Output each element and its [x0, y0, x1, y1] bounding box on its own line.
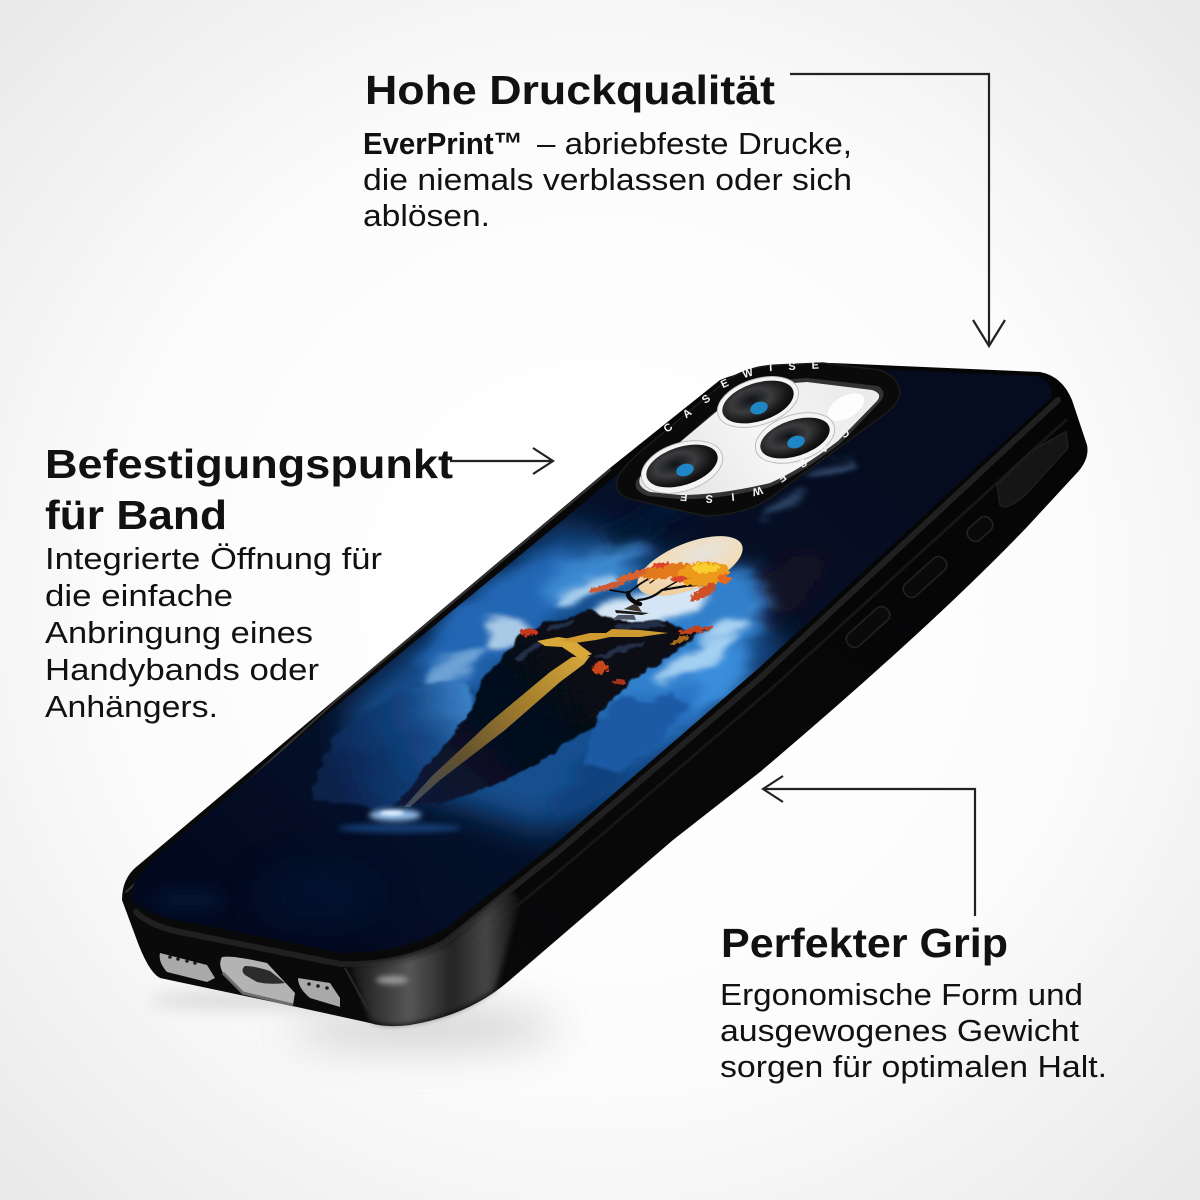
case body: [122, 363, 1088, 1026]
deep blue band: [350, 525, 790, 830]
dark navy blotches: [154, 881, 380, 909]
ring brand lettering: CASEWISE: [664, 361, 819, 432]
heading: Hohe Druckqualität: [365, 67, 775, 113]
arrow: print quality: [790, 74, 1005, 346]
printed artwork: [131, 370, 1052, 953]
side buttons: [843, 432, 1068, 650]
corner highlight: [345, 890, 520, 1025]
lens right: [749, 403, 841, 473]
tree canopy: [587, 559, 731, 604]
body text: [363, 126, 852, 233]
body text: ausgewogenes Gewicht: [720, 1013, 1079, 1048]
camera module: [616, 361, 901, 517]
body text: Integrierte Öffnung für: [45, 541, 382, 576]
lens top: [711, 367, 805, 437]
body text: sorgen für optimalen Halt.: [720, 1049, 1107, 1084]
body text: die einfache: [45, 578, 233, 613]
body text: Handybands oder: [45, 652, 319, 687]
red foliage on rock: [520, 624, 712, 684]
ring inner bevel: [636, 378, 884, 499]
body text: Ergonomische Form und: [720, 977, 1083, 1012]
body text: [720, 977, 1107, 1084]
body text: – abriebfeste Drucke,: [537, 126, 852, 161]
floating rock: [396, 610, 710, 806]
heading: Befestigungspunkt: [45, 441, 453, 487]
charging port: [220, 957, 295, 1005]
pagoda: [613, 603, 649, 620]
body text: Anhängers.: [45, 689, 218, 724]
dark clouds top: [594, 451, 857, 635]
distant mountain: [310, 675, 480, 808]
lower right mountains: [585, 690, 690, 770]
rim highlight: [126, 400, 1066, 964]
body text: Anbringung eines: [45, 615, 313, 650]
heading: für Band: [45, 492, 227, 538]
speaker grille right: [298, 978, 340, 1007]
flash: [823, 387, 869, 427]
ring brand lettering: CASEWISE: [680, 431, 849, 503]
moon: [637, 536, 743, 596]
body text: EverPrint™: [363, 126, 523, 161]
heading: Perfekter Grip: [721, 920, 1008, 966]
camera glass plate: [639, 382, 879, 495]
ring brand lettering: [664, 361, 849, 503]
phone shadow: [150, 990, 560, 1046]
arrow: grip: [763, 776, 975, 916]
speaker grille left: [160, 953, 215, 982]
lens left: [635, 431, 729, 503]
callout: print quality: [363, 67, 852, 233]
camera ring: [617, 363, 900, 516]
body text: die niemals verblassen oder sich: [363, 162, 852, 197]
rock texture: [514, 619, 666, 662]
callout: grip: [720, 920, 1107, 1084]
golden path: [404, 629, 668, 807]
blue sky glow: [403, 523, 792, 826]
arrow: strap attachment: [450, 448, 553, 474]
tree trunk and branches: [609, 577, 703, 606]
body text: ablösen.: [363, 198, 490, 233]
callout: strap attachment: [45, 441, 453, 724]
heading: [45, 441, 453, 538]
artwork base: [131, 370, 1052, 953]
body text: [45, 541, 382, 724]
phone case: [122, 361, 1088, 1030]
water and splash: [338, 809, 462, 833]
